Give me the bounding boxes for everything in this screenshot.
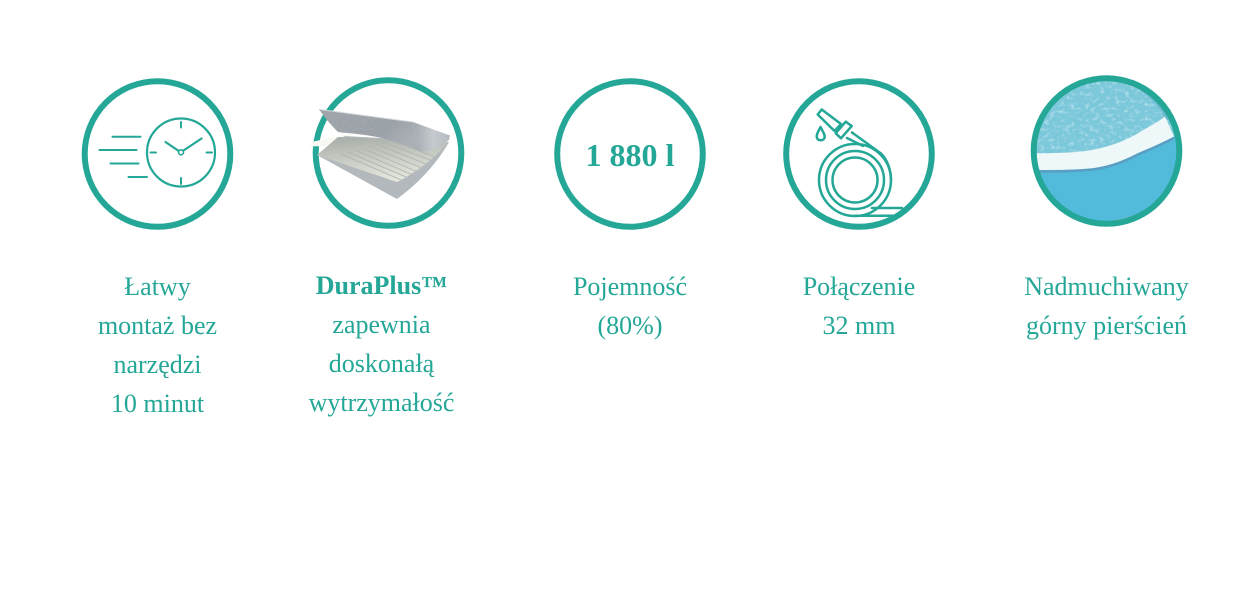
feature: easy assembly [85, 81, 230, 418]
text: inflatable ring: górny pierścień [1026, 311, 1187, 340]
text: DuraPlus: doskonałą [329, 349, 435, 378]
text: easy assembly: Łatwy [124, 272, 191, 301]
icon: material layers in circle [311, 80, 461, 226]
icon: hose in circle [786, 81, 932, 227]
feature: DuraPlus material [309, 80, 461, 417]
icon: capacity circle: 1 880 l [586, 137, 675, 173]
text: easy assembly: narzędzi [113, 350, 202, 379]
icon: clock in circle [85, 81, 230, 227]
icon: capacity circle [557, 81, 703, 227]
feature: capacity [557, 81, 703, 340]
text: easy assembly: montaż bez [98, 311, 217, 340]
icon: pool ring photo in circle [1030, 75, 1185, 227]
text: DuraPlus: wytrzymałość [309, 388, 454, 417]
feature: hose connection [786, 81, 932, 340]
text: capacity: Pojemność [573, 272, 687, 301]
text: inflatable ring: Nadmuchiwany [1024, 272, 1189, 301]
text: hose connection: Połączenie [803, 272, 915, 301]
text: capacity: (80%) [598, 311, 662, 340]
text: DuraPlus: zapewnia [332, 310, 431, 339]
text: DuraPlus: DuraPlus™ [316, 271, 447, 300]
text: hose connection: 32 mm [823, 311, 895, 340]
feature: inflatable ring [1024, 75, 1189, 340]
text: easy assembly: 10 minut [111, 389, 205, 418]
